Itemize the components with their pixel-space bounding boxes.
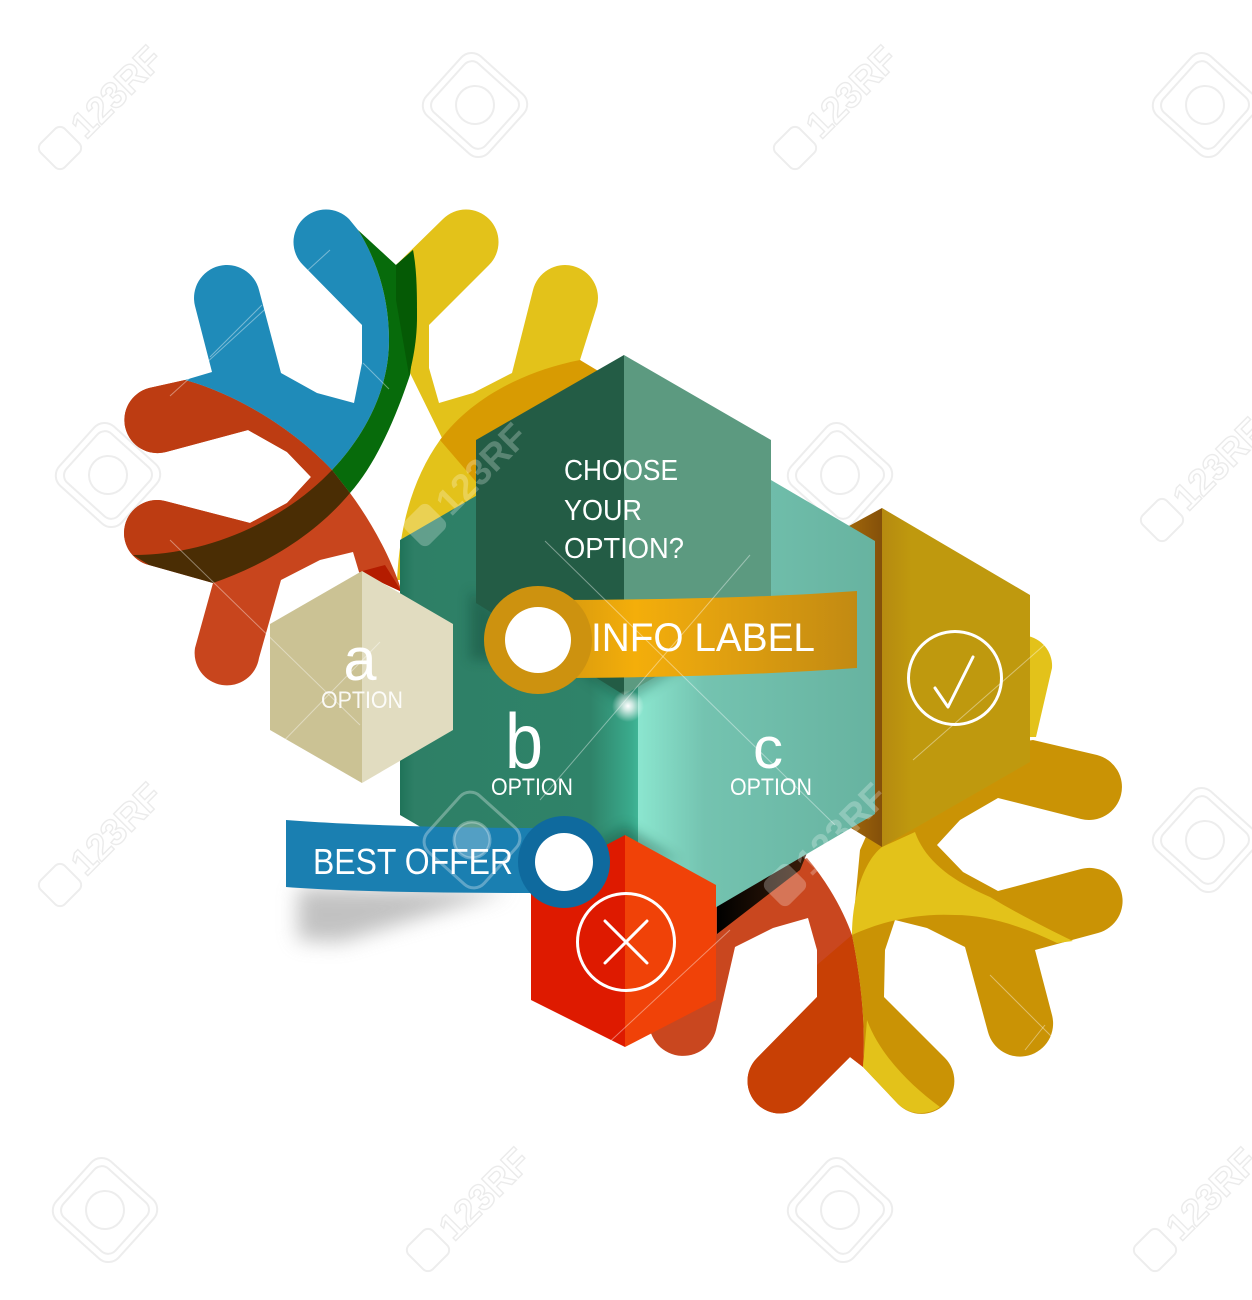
red arms (649, 858, 864, 1113)
option c label (730, 716, 812, 801)
hexagon: large teal with options b and c (400, 402, 875, 953)
hexagon shadow (470, 590, 780, 704)
option b label (491, 697, 573, 801)
best offer label: BEST OFFER (313, 841, 513, 882)
arm group: yellow (396, 209, 630, 580)
shadow below teal hexagon (717, 853, 807, 934)
hexagon: option a (270, 571, 453, 783)
option c label: OPTION (730, 774, 812, 801)
watermarks over artwork (399, 415, 895, 912)
heading: choose your option: CHOOSE (564, 455, 678, 487)
heading: choose your option: OPTION? (564, 533, 684, 565)
hexagon: option a: OPTION (321, 687, 403, 714)
snowflake: bottom right (649, 636, 1123, 1114)
watermarks over artwork: 123RF (428, 415, 535, 523)
best offer label (286, 816, 610, 908)
hexagon: choose your option (476, 355, 771, 695)
heading: choose your option: YOUR (564, 495, 642, 527)
watermark stamps: 123RF (63, 38, 170, 146)
ribbon shadow (298, 888, 510, 942)
arm group: red (124, 380, 402, 685)
info label (484, 586, 857, 694)
watermark stamps: 123RF (63, 775, 170, 883)
heading: choose your option (564, 455, 684, 565)
option b label: OPTION (491, 774, 573, 801)
option b label: b (505, 697, 543, 785)
watermarks over artwork: 123RF (788, 775, 895, 883)
icon: check mark in circle (908, 632, 1002, 724)
hexagon: gold check (882, 508, 1030, 847)
shadow above red hexagon (570, 825, 680, 862)
light glint at hexagon centre (612, 690, 644, 722)
hexagon: option a: a (344, 626, 377, 693)
snowflake: top left (124, 209, 630, 685)
gold hexagon side strip (849, 508, 882, 847)
arm group: blue (185, 209, 389, 470)
watermark stamps: 123RF (431, 1140, 538, 1248)
icon: cross in circle (578, 894, 674, 990)
option c label: c (753, 716, 783, 781)
hexagon: red cross (531, 835, 716, 1047)
curved band overlay (133, 230, 417, 583)
info label: INFO LABEL (591, 616, 815, 660)
gold arms (852, 636, 1123, 1114)
watermark stamps: 123RF (798, 38, 905, 146)
